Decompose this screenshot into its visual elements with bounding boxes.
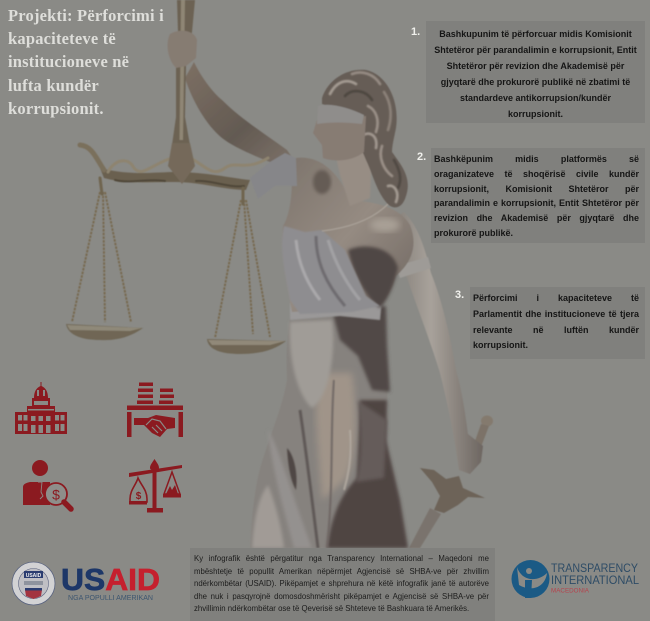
raised arm [185, 62, 294, 162]
hair back [322, 70, 408, 207]
beam ornament [80, 145, 268, 204]
title: lufta kundër [8, 76, 99, 95]
USAID wordmark: USAID [61, 562, 160, 597]
icon: scale with money bag: $ [136, 491, 142, 502]
disclaimer note: mbështetje të popullit Amerikan nëpërmjet Agjencisë së SHBA-ve për zhvillim [194, 566, 489, 576]
panel: point 2: oraganizateve të shoqërisë civile kundër [434, 169, 639, 179]
panel: point 1: Bashkupunim të përforcuar midis Komisionit [439, 29, 632, 39]
shoulder highlight [370, 218, 400, 232]
panel: point 2: Bashkëpunim midis platformës së [434, 154, 639, 164]
cloth folds [296, 236, 360, 306]
title [8, 6, 164, 118]
left scale pan [66, 324, 143, 340]
panel: point 3: korrupsionit. [473, 340, 528, 350]
icon: person with magnifying glass [23, 460, 71, 509]
disclaimer note: zhvillimin ndërkombëtar ose të Qeverisë së Shteteve të Bashkuara të Amerikës. [194, 604, 469, 613]
strap line [322, 204, 388, 231]
panel: point 3: Parlamentit dhe institucioneve të tjera [473, 309, 639, 319]
panel: point 2: revizion dhe Akademisë për gjyqtarë dhe [434, 213, 639, 223]
Transparency International wordmark: INTERNATIONAL [551, 575, 640, 587]
title: kapaciteteve të [8, 29, 116, 48]
number 3: 3. [455, 289, 464, 301]
right arm [388, 212, 483, 474]
panel: point 1: Shtetëror për revizion dhe Akademisë për [447, 61, 624, 71]
sleeve [250, 153, 297, 199]
scale chains [72, 192, 270, 338]
hair curls [330, 72, 400, 202]
panel: point 2: prokurorë publikë. [434, 228, 513, 238]
disclaimer note: Ky infografik është përgatitur nga Transparency International – Maqedoni me [194, 554, 489, 563]
number 1: 1. [411, 26, 420, 38]
hand on rod [168, 31, 197, 68]
USAID seal: USAID [26, 573, 42, 579]
blindfold [317, 105, 364, 124]
panel: point 2: korrupsionit, Komisionit Shtetëror për [434, 184, 639, 194]
disclaimer note [190, 548, 495, 621]
panel: point 1: korrupsionit. [508, 109, 563, 119]
icon: handshake under table with money [127, 382, 183, 437]
USAID seal [12, 562, 55, 605]
icon: person with magnifying glass: $ [52, 486, 60, 502]
title: institucioneve në [8, 52, 129, 71]
disclaimer note: dhe nuk i pasqyrojnë domosdoshmërisht pikëpamjet e Agjencisë së SHBA-ve për [194, 592, 489, 600]
Transparency International emblem [512, 560, 550, 598]
dress skirt [250, 300, 408, 548]
icon: scale with money bag [129, 459, 182, 512]
dark bodice [348, 246, 398, 308]
panel: point 3: Përforcimi i kapaciteteve të [473, 293, 639, 303]
armband [396, 257, 431, 278]
number 2: 2. [417, 151, 426, 163]
sword guard and pommel [420, 416, 493, 513]
title: Projekti: Përforcimi i [8, 6, 164, 25]
panel: point 1: gjyqtarë dhe prokurorë publikë në zbatimi të [441, 77, 630, 87]
panel: point 3: relevante në luftën kundër [473, 325, 639, 335]
USAID tagline: NGA POPULLI AMERIKAN [68, 593, 153, 602]
panel: point 2: parandalimin e korrupsionit, Entit Shtetëror për [434, 198, 639, 208]
draped cloth [282, 226, 380, 314]
panel: point 3 [470, 287, 645, 359]
right scale pan [207, 339, 286, 354]
panel: point 1: Shtetëror për parandalimin e korrupsionit, Entit [434, 45, 637, 55]
icon: capitol building [15, 382, 67, 434]
dress folds and shadows [252, 298, 408, 548]
panel: point 1: standardeve antikorrupsion/kundër [460, 93, 611, 103]
face [313, 116, 366, 160]
Transparency International wordmark: MACEDONIA [551, 588, 590, 594]
sword blade [409, 508, 441, 548]
Transparency International wordmark [551, 563, 640, 594]
beam centre [168, 143, 195, 184]
Transparency International wordmark: TRANSPARENCY [551, 563, 638, 575]
bust and shoulders [282, 158, 414, 312]
title: korrupsionit. [8, 99, 104, 118]
rod [172, 0, 195, 145]
panel: point 2 [431, 148, 645, 243]
neck [335, 148, 372, 206]
disclaimer note: ndërkombëtar (USAID). Pikëpamjet e shprehura në këtë infografik janë të autorëve [194, 579, 489, 588]
armpit shadow [313, 170, 331, 194]
panel: point 1 [426, 21, 645, 123]
